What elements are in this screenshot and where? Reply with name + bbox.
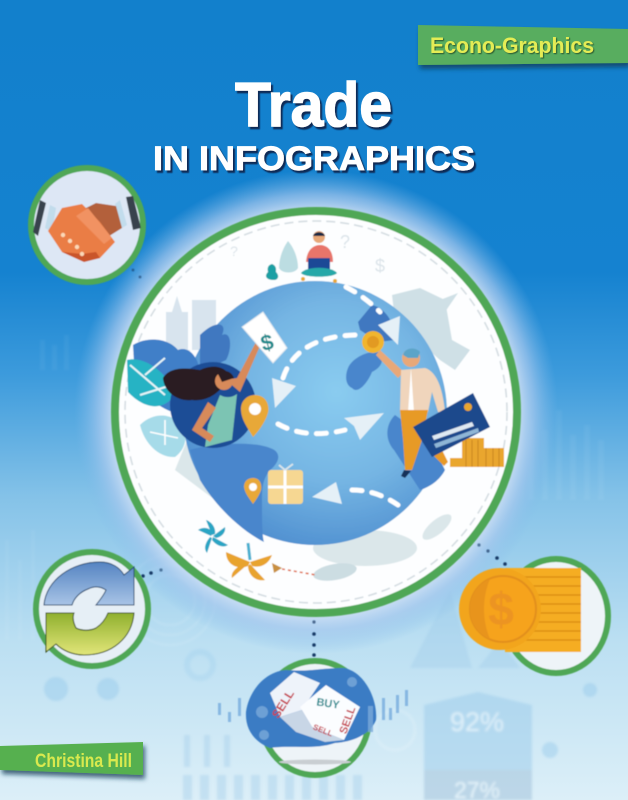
- dollar ticket: [242, 312, 287, 363]
- gold map pin large: [241, 395, 268, 437]
- author tab: Christina Hill: [35, 751, 132, 772]
- paper planes: [272, 316, 400, 504]
- halo behind main circle: [74, 170, 558, 654]
- continents: [190, 305, 445, 542]
- small candles beside dice: [218, 690, 408, 722]
- subtitle: IN INFOGRAPHICS: [153, 140, 475, 178]
- refresh arrows badge: [36, 552, 148, 666]
- gold palm: [226, 543, 272, 580]
- pale question mark and dollar: $: [375, 256, 385, 276]
- background triangles: [410, 590, 520, 668]
- flight dashes: [278, 287, 398, 505]
- series tab: Econo-Graphics: [430, 33, 594, 58]
- small pin: [244, 478, 261, 504]
- coin stack badge: [459, 559, 608, 673]
- series tab: [418, 25, 628, 65]
- background people row: [183, 735, 362, 800]
- faint background data graphics: [5, 335, 604, 800]
- pale skyline left: [150, 296, 216, 370]
- buy sell dice badge: [246, 661, 376, 775]
- dollar ticket: $: [258, 329, 276, 356]
- buy sell dice badge: SELL: [312, 722, 334, 739]
- leaves left: [127, 340, 200, 457]
- inner dashed ring: [125, 221, 507, 603]
- pale hills lower: [175, 438, 455, 584]
- man with coin and card: [362, 331, 448, 478]
- background percent panel: [424, 692, 532, 800]
- title: Trade: [235, 71, 392, 140]
- teal palm: [198, 520, 228, 553]
- person with laptop on globe: [301, 231, 337, 283]
- ring: [115, 211, 517, 613]
- small orange arrow: [272, 563, 316, 575]
- pale question mark and dollar: ?: [340, 232, 350, 252]
- connector dots: [132, 269, 507, 657]
- woman: [163, 342, 260, 448]
- pale question mark and dollar: [230, 232, 385, 276]
- globe: [183, 281, 447, 545]
- background rings and gear: [125, 555, 415, 750]
- gold coin stacks: [450, 438, 504, 467]
- small trees: [266, 241, 298, 280]
- pale question mark and dollar: ?: [230, 243, 238, 259]
- buy sell dice badge: SELL: [269, 687, 297, 721]
- coin stack badge: $: [488, 583, 514, 635]
- handshake badge: [31, 168, 143, 282]
- main circle illustration: [115, 211, 517, 613]
- buy sell dice badge: BUY: [316, 696, 341, 712]
- background dots: [44, 677, 597, 758]
- buy sell dice badge: SELL: [337, 705, 358, 736]
- credit card: [413, 393, 490, 457]
- background bar charts: [5, 335, 604, 640]
- background percent panel: 92%: [450, 707, 504, 737]
- gift box: [268, 464, 303, 504]
- pale skyline right: [392, 288, 470, 370]
- author tab: [0, 742, 143, 775]
